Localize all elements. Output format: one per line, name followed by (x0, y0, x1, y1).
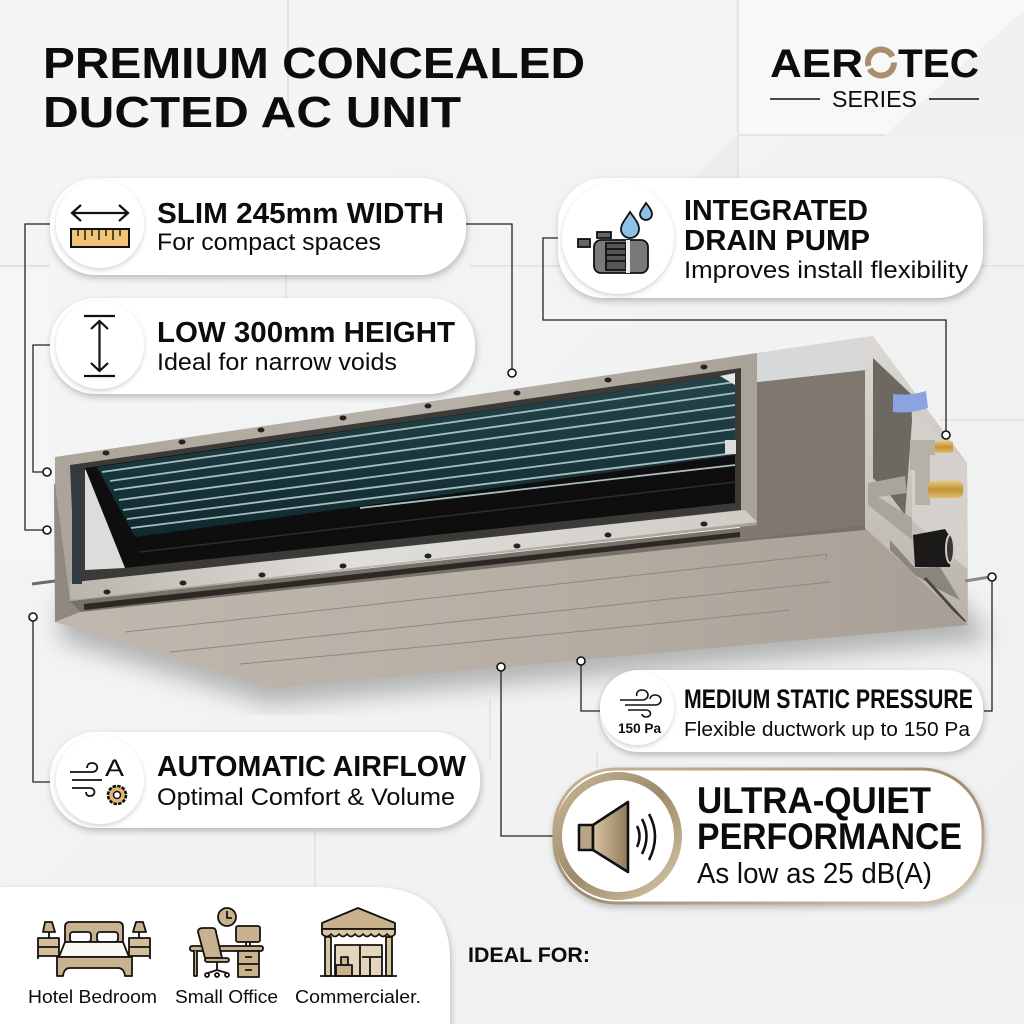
icon: airflow A and gear (70, 755, 126, 804)
callout: ultra-quiet performance: As low as 25 dB(A) (697, 858, 932, 890)
title (43, 39, 585, 137)
connector lines (25, 224, 996, 836)
icon: commercial storefront (320, 908, 397, 976)
panel: ideal-for uses: Commercialer. (295, 987, 421, 1007)
panel: ideal-for uses (0, 887, 450, 1024)
callout: slim width: For compact spaces (157, 229, 381, 256)
callout: drain pump (558, 178, 983, 298)
callout: low height: Ideal for narrow voids (157, 349, 397, 376)
flange (55, 353, 757, 601)
callout: automatic airflow (50, 732, 480, 828)
hanger tabs (32, 581, 55, 584)
title: DUCTED AC UNIT (43, 88, 461, 137)
callout: medium static pressure (600, 670, 983, 752)
callout: automatic airflow: AUTOMATIC AIRFLOW (157, 751, 467, 783)
mounting bracket (868, 476, 912, 540)
icon: airflow with 150 Pa (618, 690, 661, 736)
bright corner tabs (720, 373, 735, 385)
icon: pump with water drops (578, 203, 652, 273)
rivets (102, 364, 708, 594)
callout: medium static pressure: Flexible ductwork up to 150 Pa (684, 719, 971, 741)
brass fittings (935, 441, 953, 453)
callout: drain pump: INTEGRATED (684, 195, 868, 227)
callout: drain pump: DRAIN PUMP (684, 225, 870, 257)
logo: Aerotec Series: AER (770, 42, 863, 86)
bottom flange strip (70, 510, 757, 600)
callout: low height: LOW 300mm HEIGHT (157, 317, 455, 349)
left side strip (54, 482, 80, 622)
label: ideal for: IDEAL FOR: (468, 944, 590, 967)
panel: ideal-for uses: Small Office (175, 987, 278, 1007)
title: PREMIUM CONCEALED (43, 39, 585, 88)
icon: speaker (579, 802, 655, 872)
icon: height arrow (84, 316, 115, 376)
window frame (70, 368, 741, 582)
front duct panel (740, 370, 865, 540)
black box (913, 529, 952, 567)
coil black (85, 375, 735, 568)
callout: ultra-quiet performance (554, 769, 983, 903)
icon: airflow A and gear: A (105, 755, 124, 782)
dark gap below flange (84, 532, 740, 610)
AC unit (32, 336, 990, 705)
blue pipe (893, 391, 928, 412)
callout: slim width: SLIM 245mm WIDTH (157, 198, 444, 230)
right side plate (865, 336, 968, 625)
left dark strip with rivets (72, 466, 82, 584)
callout: slim width (50, 178, 466, 275)
bottom panel (55, 526, 968, 688)
speckled edge (70, 525, 865, 612)
coil teal (97, 375, 735, 537)
icon: hotel bedroom (38, 922, 150, 976)
logo: Aerotec Series (770, 42, 979, 112)
callout: drain pump: Improves install flexibility (684, 257, 968, 284)
icon: small office (190, 908, 263, 977)
icon: ruler with arrow (71, 205, 129, 247)
logo: Aerotec Series: TEC (898, 42, 979, 86)
callout: ultra-quiet performance: PERFORMANCE (697, 816, 962, 857)
logo: Aerotec Series: SERIES (832, 86, 917, 112)
panel: ideal-for uses: Hotel Bedroom (28, 987, 157, 1007)
galvanised top (757, 337, 865, 382)
callout: automatic airflow: Optimal Comfort & Volume (157, 784, 455, 811)
white left triangle (85, 468, 125, 570)
icon: airflow with 150 Pa: 150 Pa (618, 721, 661, 736)
callout: low height (50, 298, 475, 394)
coil fins (102, 382, 735, 528)
callout: ultra-quiet performance: ULTRA-QUIET (697, 780, 931, 821)
dark inner side recess (873, 358, 912, 515)
panel seams (125, 554, 830, 664)
